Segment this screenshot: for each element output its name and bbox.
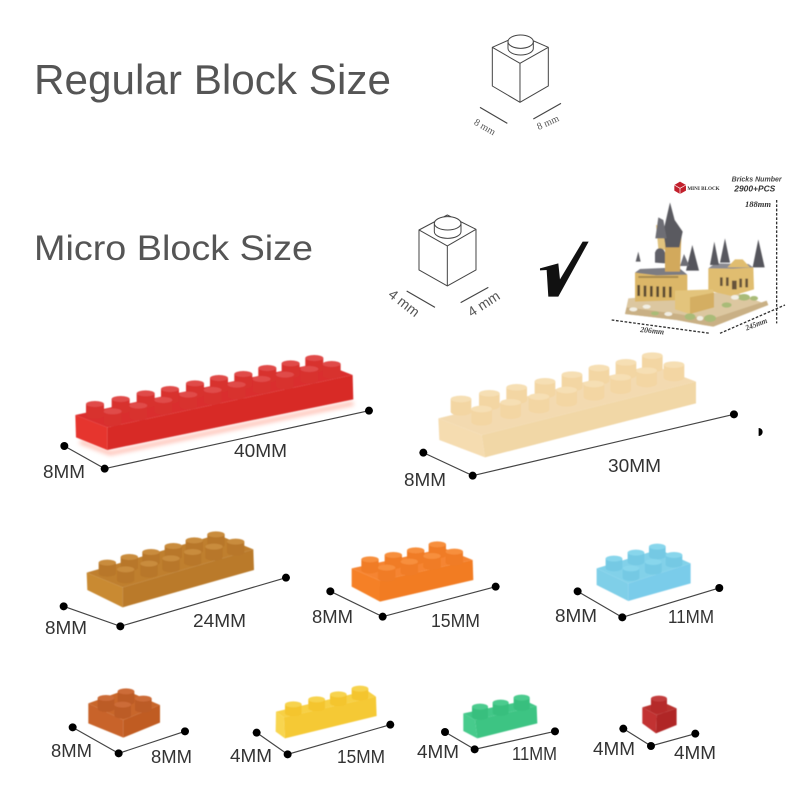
brick: rust 8x8 — [51, 688, 192, 767]
logo: mini block: MINI BLOCK — [687, 186, 720, 192]
brick: red 40x8: 8MM — [43, 462, 85, 482]
heading: micro block size: Micro Block Size — [34, 229, 313, 268]
logo: mini block — [674, 182, 720, 194]
brick: dark red 4x4: 4MM — [593, 739, 635, 759]
brick: light blue 11x8 — [555, 544, 723, 627]
text: piece count: 2900+PCS — [733, 184, 776, 194]
dimension: height — [745, 200, 777, 323]
text: bricks number: Bricks Number — [732, 174, 783, 183]
brick: red 40x8 — [43, 355, 373, 482]
diagram: regular block outline: 8 mm — [472, 117, 497, 138]
brick: dark red 4x4 — [593, 696, 716, 763]
diagram: regular block outline — [472, 35, 561, 138]
brick: dark red 4x4: 4MM — [674, 743, 716, 763]
diagram: micro block outline: 4 mm — [465, 287, 503, 320]
brick: rust 8x8: 8MM — [51, 741, 92, 761]
dimension: depth — [720, 305, 785, 333]
brick: yellow 15x4 — [230, 686, 394, 767]
diagram: micro block outline — [385, 215, 503, 320]
dimension: height: 188mm — [745, 200, 772, 209]
product photo: castle model — [612, 174, 785, 336]
brick: brown 24x8: 8MM — [45, 618, 87, 638]
brick: cream 30x8: 30MM — [608, 456, 661, 476]
brick: brown 24x8 — [45, 531, 290, 638]
brick: brown 24x8: 24MM — [193, 611, 246, 631]
heading: regular block size: Regular Block Size — [34, 56, 391, 103]
castle artwork — [625, 202, 768, 327]
dimension: width: 206mm — [639, 325, 665, 336]
brick: light blue 11x8: 8MM — [555, 606, 597, 626]
brick: green 11x4 — [417, 695, 559, 764]
brick: orange 15x8 — [312, 541, 500, 631]
dimension: width — [612, 320, 710, 336]
dimension: depth: 245mm — [743, 316, 769, 333]
brick: cream 30x8: 8MM — [404, 470, 446, 490]
brick: green 11x4: 4MM — [417, 742, 459, 762]
brick: cream 30x8 — [404, 352, 763, 490]
brick: orange 15x8: 8MM — [312, 607, 353, 627]
brick: red 40x8: 40MM — [234, 441, 287, 461]
brick: yellow 15x4: 4MM — [230, 746, 272, 766]
brick: yellow 15x4: 15MM — [337, 747, 385, 767]
brick: rust 8x8: 8MM — [151, 747, 192, 767]
diagram: micro block outline: 4 mm — [385, 286, 423, 320]
diagram: regular block outline: 8 mm — [535, 113, 561, 133]
brick: green 11x4: 11MM — [512, 744, 557, 764]
brick: light blue 11x8: 11MM — [668, 607, 714, 627]
brick: orange 15x8: 15MM — [431, 611, 480, 631]
icon: check mark — [540, 242, 589, 297]
